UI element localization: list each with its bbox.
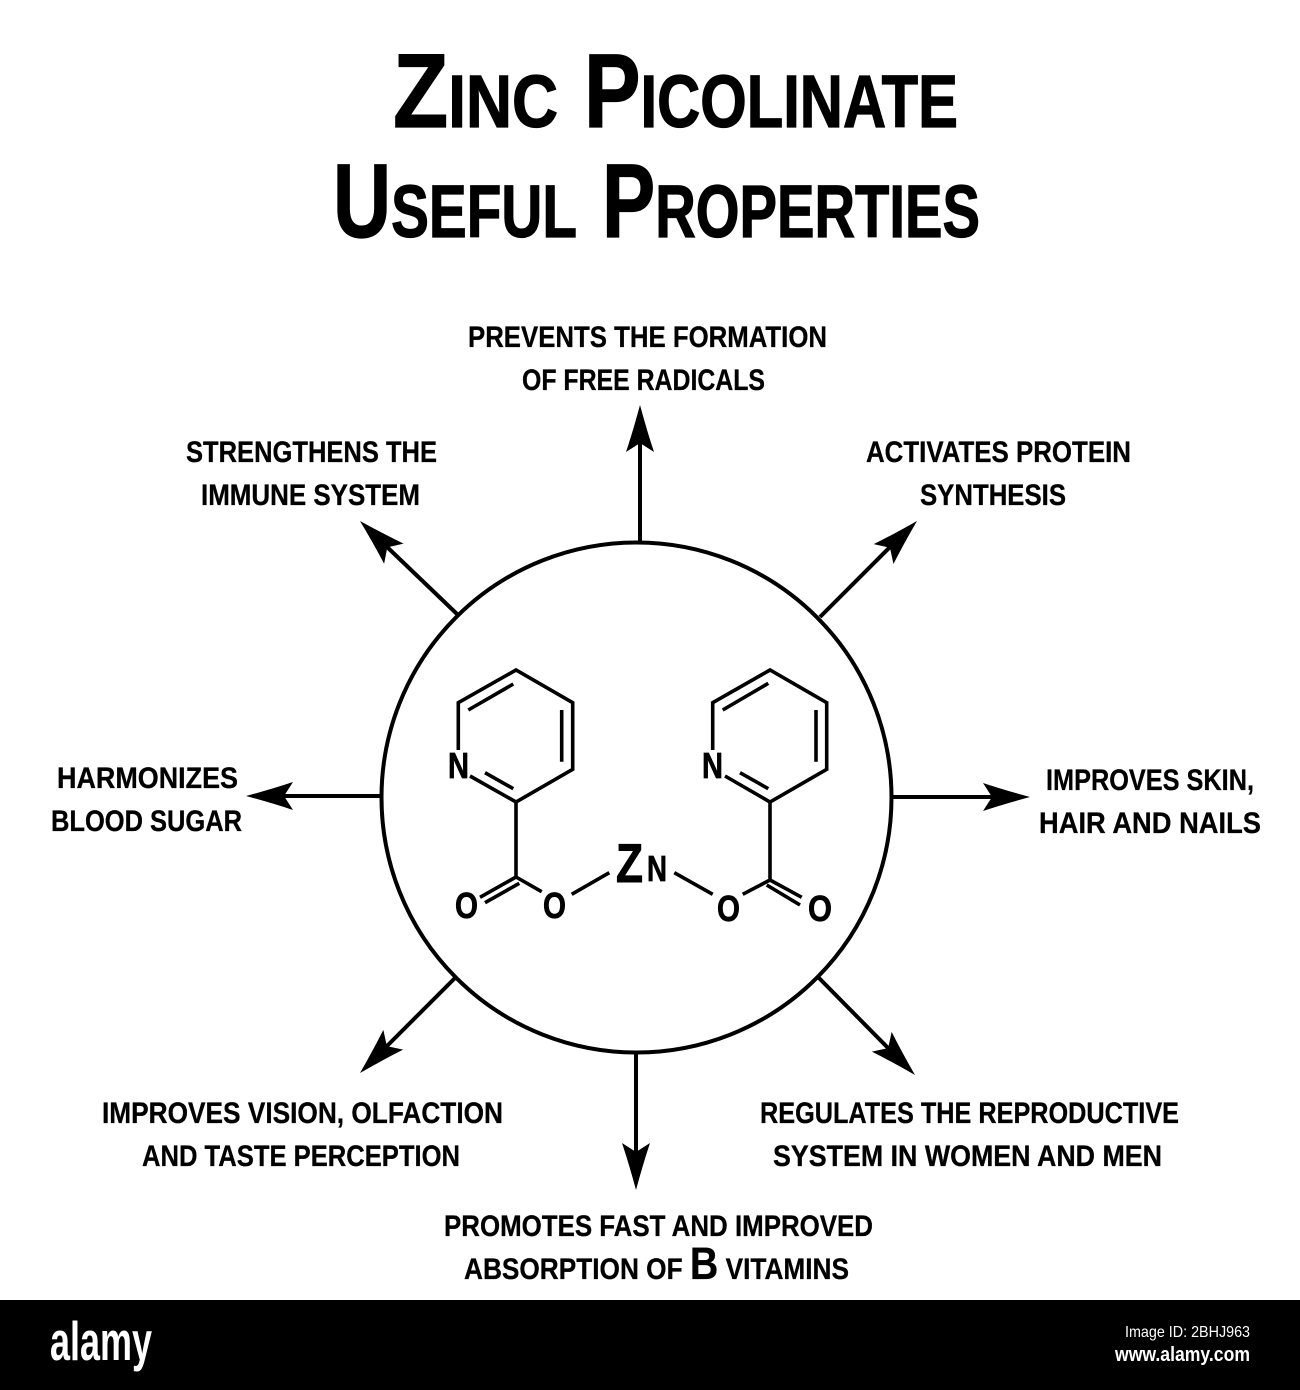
- central circle: [382, 542, 892, 1052]
- label: activates protein synthesis: SYNTHESIS: [920, 479, 1066, 512]
- title: [333, 33, 980, 260]
- title: ZINC: [393, 33, 558, 150]
- label: improves vision, olfaction, taste: AND TASTE PERCEPTION: [142, 1140, 460, 1173]
- atom labels: N: [702, 745, 723, 786]
- label: promotes absorption of B vitamins: ABSORPTION OF B VITAMINS: [464, 1238, 849, 1289]
- label: promotes absorption of B vitamins: [444, 1210, 873, 1289]
- label: strengthens immune system: STRENGTHENS THE: [186, 436, 437, 469]
- left pyridine ring: [458, 670, 573, 802]
- label: promotes absorption of B vitamins: PROMOTES FAST AND IMPROVED: [444, 1210, 873, 1243]
- right carboxylate bonds: [674, 802, 802, 905]
- arrow: up-right: [820, 511, 927, 617]
- footer bar: [0, 1300, 1300, 1390]
- label: regulates reproductive system: [760, 1097, 1179, 1173]
- title: PICOLINATE: [584, 33, 958, 150]
- atom labels: N: [647, 848, 667, 889]
- label: strengthens immune system: IMMUNE SYSTEM: [201, 479, 420, 512]
- footer logo: alamy: [50, 1310, 152, 1372]
- atom labels: Z: [616, 832, 643, 894]
- left carboxylate bonds: [480, 802, 609, 903]
- label: prevents free radicals: [468, 321, 827, 397]
- molecule: zinc picolinate structure: [448, 670, 832, 929]
- label: improves skin, hair and nails: [1039, 764, 1261, 840]
- label: improves skin, hair and nails: HAIR AND NAILS: [1039, 807, 1261, 840]
- title: PROPERTIES: [602, 143, 980, 260]
- label: regulates reproductive system: SYSTEM IN WOMEN AND MEN: [773, 1140, 1162, 1173]
- arrow: down-right: [818, 977, 925, 1085]
- label: improves skin, hair and nails: IMPROVES SKIN,: [1046, 764, 1254, 797]
- arrow: down-left: [350, 977, 456, 1083]
- atom labels: O: [455, 885, 478, 926]
- arrow: down: [622, 1054, 650, 1190]
- label: improves vision, olfaction, taste: [102, 1097, 503, 1173]
- arrow: right: [892, 783, 1030, 811]
- label: improves vision, olfaction, taste: IMPROVES VISION, OLFACTION: [102, 1097, 503, 1130]
- atom labels: O: [717, 888, 740, 929]
- footer website: www.alamy.com: [1114, 1344, 1250, 1366]
- label: harmonizes blood sugar: [51, 762, 242, 838]
- label: strengthens immune system: [186, 436, 437, 512]
- label: prevents free radicals: PREVENTS THE FORMATION: [468, 321, 827, 354]
- label: harmonizes blood sugar: BLOOD SUGAR: [51, 805, 242, 838]
- footer image id: Image ID: 2BHJ963: [1125, 1324, 1250, 1341]
- atom labels: O: [808, 888, 832, 929]
- label: regulates reproductive system: REGULATES THE REPRODUCTIVE: [760, 1097, 1179, 1130]
- arrow: left: [246, 782, 381, 810]
- atom labels: O: [543, 885, 566, 926]
- atom labels: N: [448, 745, 469, 786]
- atom labels: [448, 745, 832, 929]
- right pyridine ring: [713, 670, 827, 802]
- title: USEFUL: [333, 143, 577, 260]
- label: activates protein synthesis: [866, 436, 1131, 512]
- label: harmonizes blood sugar: HARMONIZES: [57, 762, 238, 795]
- arrow: up: [626, 405, 654, 541]
- label: activates protein synthesis: ACTIVATES PROTEIN: [866, 436, 1131, 469]
- arrow: up-left: [350, 511, 457, 614]
- label: prevents free radicals: OF FREE RADICALS: [522, 364, 765, 397]
